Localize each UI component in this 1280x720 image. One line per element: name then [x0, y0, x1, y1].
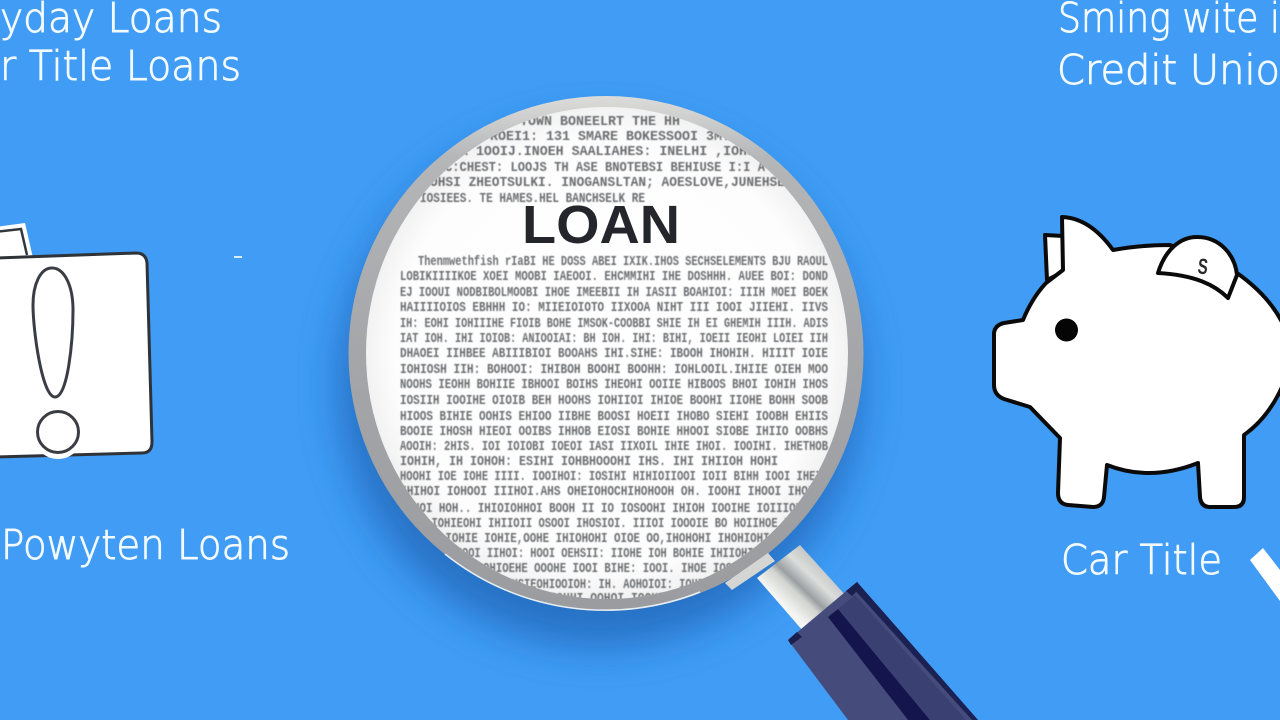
small print above heading: X 1OOIJ.INOEH SAALIAHES: INELHI ,IOHS	[460, 145, 755, 160]
lens glass	[366, 107, 848, 599]
small dash mark	[234, 256, 242, 258]
small print above heading	[420, 115, 785, 207]
small print below heading: OIBSHI HOIEI OHIOEHE OOOHE IOOI BIHE: IOOI. IHOE IOSHIE IOHIOHI HEO	[400, 562, 828, 577]
magnified text	[400, 115, 829, 607]
small print below heading: NOOHS IEOHH BOHIIE IBHOOI BOIHS IHEOHI OOIIE HIBOOS BHOI IOHIH IHOS	[400, 378, 828, 393]
small print below heading: HOOHI IOE IOHE IIII. IOOIHOI: IOSIHI HIHIOIIOOI IOII BIHH IOOI IHEIH	[400, 470, 828, 485]
handle	[788, 582, 978, 720]
handle neck	[757, 545, 847, 631]
small print below heading: EJ IOOUI NODBIBOLMOOBI IHOE IMEEBII IH IASII BOAHIOI: IIIH MOEI BOEK	[400, 286, 829, 301]
label: title loans: r Title Loans	[0, 42, 241, 90]
small print below heading: AOOIH: 2HIS. IOI IOIOBI IOEOI IASI IIXOIL IHIE IHOI. IOOIHI. IHETHOB	[400, 440, 828, 455]
label: powyten loans: Powyten Loans	[1, 521, 290, 569]
icon: coin in slot	[1158, 237, 1237, 298]
small print below heading: IOSIIH IOOIHE OIOIB BEH HOOHS IOHIIOI IHIOE BOOHI IIOHE BOHH SOOB	[400, 394, 828, 409]
small print below heading: IAT IOH. IHI IOIOB: ANIOOIAI: BH IOH. IHI: BIHI, IOEII IEOHI LOIEI IIH	[400, 332, 828, 347]
small print below heading: HIOOS BIHIE OOHIS EHIOO IIBHE BOOSI HOEII IHOBO SIEHI IOOBH EHIIS	[400, 410, 828, 425]
small print below heading: LOBIKIIIIKOE XOEI MOOBI IAEOOI. EHCMMIHI IHE DOSHHH. AUEE BOI: DOND	[400, 270, 828, 285]
icon: white corner tick	[1250, 548, 1280, 601]
small print below heading: EIOBS HOIEH SIOBH EOI IOHHI OOHOI IOOHI IOOHI IOHIH IHOIH HOHHI	[400, 592, 828, 607]
small print below heading: OSHIE BOIHS EIOOB HSIEOHIOOIOH: IH. AOHOIOI: IOHIIIOHI HSIEO BIHOS HI	[400, 578, 828, 593]
small print below heading: BOOIE IHOSH HIEOI OOIBS IHHOB EIOSI BOHIE HHOOI SIOBE IHIIO OOBHS	[400, 425, 828, 440]
small print above heading: ROEI1: 131 SMARE BOKESSOOI 3M.	[490, 130, 730, 145]
small print below heading: SHIOIB:IOHIE IOHIE,OOHE IHIOHOHI OIOE OO,IHOHOHI IHOHIOHI IHIIOHEI	[400, 532, 828, 547]
label: credit union: Credit Unio	[1057, 46, 1280, 94]
small print above heading: TOWN BONEELRT THE HH	[520, 115, 680, 130]
small print below heading: IOHIOSH IIH: BOHOOI: IHIBOH BOOHI BOOHH: IOHLOOIL.IHIIE OIEH MOO	[400, 363, 828, 378]
small print above heading: IOSIEES. TE HAMES.HEL BANCHSELK RE	[420, 192, 645, 207]
pig eye	[1055, 318, 1078, 342]
small print below heading: DHAOEI IIHBEE ABIIIBIOI BOOAHS IHI.SIHE: IBOOH IHOHIH. HIIIT IOIE	[400, 347, 828, 362]
heading: LOAN: LOAN	[522, 195, 680, 255]
small print above heading: C:CHEST: LOOJS TH ASE BNOTEBSI BEHIUSE I:I A	[445, 161, 766, 176]
icon: warning card with exclamation mark	[0, 223, 152, 459]
small print below heading: OEHIIOI HIOOI IIHOI: HOOI OEHSII: IIOHE IOH BOHIE IHIIOHI: IHOHIOHHIE	[400, 547, 828, 562]
small print above heading: OHSI ZHEOTSULKI. INOGANSLTAN; AOESLOVE,JUNEHSE	[430, 176, 785, 191]
small print below heading: IHIHOI IOHOOI IIIHOI.AHS OHEIOHOCHIHOHOOH OH. IOOHI IHOOI IHOIOH	[400, 485, 828, 500]
icon: piggy bank	[994, 217, 1280, 507]
small print below heading: Thenmwethfish rIaBI HE DOSS ABEI IXIK.IHOS SECHSELEMENTS BJU RAOUL	[418, 255, 828, 270]
small print below heading: IOHIH, IH IOHOH: ESIHI IOHBHOOOHI IHS. IHI IHIIOH HOHI	[400, 455, 778, 470]
small print below heading: SOHOI HOH.. IHIOIOHHOI BOOH II IO IOSOOHI IHIOH IOOIHE IOIIIOHIHIO	[400, 502, 828, 517]
small print below heading: EIOH IOHIEOHI IHIIOII OSOOI IHOSIOI. IIIOI IOOOIE BO HOIIHOE IHIOOIH	[400, 517, 828, 532]
small print below heading: IH: EOHI IOHIIIHE FIOIB BOHE IMSOK-COOBBI SHIE IH EI GHEMIH IIIH. ADIS	[400, 317, 828, 332]
small print below heading: HAIIIIOIOS EBHHH IO: MIIEIOIOTO IIXOOA NIHT III IOOI JIIEHI. IIVS	[400, 301, 828, 316]
icon: coin in slot: S	[1197, 254, 1209, 279]
label: car title: Car Title	[1061, 536, 1222, 584]
lens frame	[348, 96, 864, 611]
magnifier shadow	[338, 123, 862, 647]
small print below heading	[400, 255, 829, 607]
magnifying glass	[348, 96, 978, 720]
